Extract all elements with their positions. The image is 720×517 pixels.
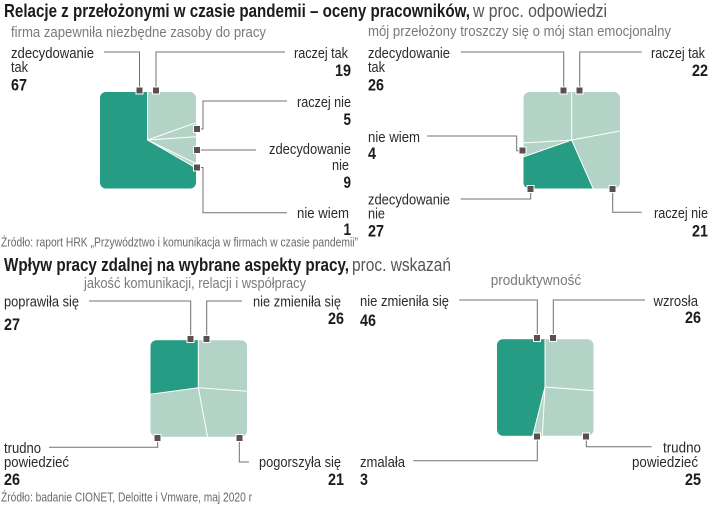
label: wzrosła 26: wzrosła [653,293,699,310]
label: raczej nie 21 [654,205,708,240]
leader: raczej tak [152,52,285,94]
label: raczej tak 19: 19 [335,61,351,80]
label: trudno powiedzieć 26 [4,440,69,489]
label: raczej nie 5: raczej nie [297,94,351,111]
heading: section 2: Wpływ pracy zdalnej na wybrane aspekty pracy, [4,255,349,275]
leader: trudno powiedzieć [582,433,652,447]
label: zdecydowanie tak 26: tak [368,59,385,76]
label: pogorszyła się 21 [259,454,344,489]
label: zdecydowanie tak 67: 67 [11,76,27,94]
label: raczej tak 22 [651,45,708,80]
label: poprawiła się 27: 27 [4,315,20,334]
label: zdecydowanie nie 27 [368,192,450,240]
label: zdecydowanie tak 26 [368,45,450,94]
leader: raczej nie [194,101,287,132]
label: zdecydowanie nie 9: 9 [344,173,351,192]
label: raczej nie 21: 21 [692,222,708,240]
label: nie zmieniła się 26 [253,294,344,328]
label: zmalała 3 [360,454,406,489]
subtitle: chart 1: firma zapewniła niezbędne zasoby do pracy [11,25,267,41]
heading: section 1: w proc. odpowiedzi [472,1,607,21]
label: zdecydowanie tak 26: zdecydowanie [368,45,450,62]
label: poprawiła się 27: poprawiła się [4,294,79,310]
leader: trudno powiedzieć [49,434,161,447]
leader: zdecydowanie nie [461,186,534,199]
subtitle: chart 2: mój przełożony troszczy się o mój stan emocjonalny [368,24,672,40]
label: wzrosła 26 [653,293,701,327]
label: trudno powiedzieć 25 [632,440,701,489]
label: zmalała 3: zmalała [360,454,406,471]
leader: nie wiem [427,136,526,154]
leader: zdecydowanie tak [104,52,143,94]
label: zdecydowanie tak 26: 26 [368,76,384,94]
label: trudno powiedzieć 25: trudno [663,440,701,456]
label: zdecydowanie tak 67 [11,45,94,94]
label: raczej nie 21: raczej nie [654,205,708,222]
label: nie wiem 4 [368,129,420,163]
label: nie wiem 1: nie wiem [297,205,349,222]
leader: raczej nie [609,186,642,212]
label: raczej nie 5 [297,94,351,129]
leader: raczej tak [576,52,642,94]
label: zdecydowanie nie 9: nie [332,157,349,174]
source: section 1: Źródło: raport HRK „Przywództwo i komunikacja w firmach w czasie pandemii” [1,234,358,250]
label: zdecydowanie nie 9 [269,141,351,192]
label: zdecydowanie tak 67: zdecydowanie [11,45,94,62]
label: nie zmieniła się 46: nie zmieniła się [360,293,449,310]
label: nie wiem 1 [297,205,351,239]
chart: przełożony troszczy się [427,52,642,212]
chart: produktywność [413,300,652,461]
label: wzrosła 26: 26 [685,308,701,327]
leader: poprawiła się [89,301,194,342]
subtitle: chart 3: jakość komunikacji, relacji i współpracy [83,276,307,292]
chart: jakość komunikacji [49,301,249,462]
label: zmalała 3: 3 [360,470,368,489]
label: pogorszyła się 21: pogorszyła się [259,454,341,471]
label: nie zmieniła się 46: 46 [360,311,376,330]
label: raczej nie 5: 5 [344,110,351,129]
chart: firma zapewniła zasoby [100,52,287,213]
leader: nie zmieniła się [459,300,540,342]
label: pogorszyła się 21: 21 [328,470,344,489]
label: trudno powiedzieć 26: powiedzieć [4,454,69,471]
label: trudno powiedzieć 25: 25 [685,470,701,489]
leader: nie zmieniła się [203,301,242,342]
label: nie wiem 4: nie wiem [368,129,420,146]
leader: nie wiem [194,164,287,213]
source: section 2: Źródło: badanie CIONET, Deloitte i Vmware, maj 2020 r [1,490,252,504]
subtitle: chart 4: produktywność [491,273,581,289]
label: trudno powiedzieć 26: 26 [4,470,20,489]
leader: zdecydowanie nie [194,146,256,154]
label: zdecydowanie nie 27: 27 [368,222,384,240]
label: trudno powiedzieć 25: powiedzieć [632,454,698,471]
label: raczej tak 19 [294,45,351,80]
label: zdecydowanie nie 27: zdecydowanie [368,192,450,208]
label: raczej tak 22: raczej tak [651,45,705,62]
label: raczej tak 22: 22 [692,61,708,80]
leader: pogorszyła się [236,434,249,462]
leader: zmalała [413,433,540,461]
label: zdecydowanie nie 9: zdecydowanie [269,141,351,158]
label: poprawiła się 27 [4,294,79,334]
label: nie zmieniła się 26: nie zmieniła się [253,294,341,310]
label: nie wiem 1: 1 [344,220,351,239]
heading: section 2: proc. wskazań [352,255,451,275]
label: zdecydowanie tak 67: tak [11,59,28,76]
heading: section 1: Relacje z przełożonymi w czasie pandemii – oceny pracowników, [4,1,470,21]
label: raczej tak 19: raczej tak [294,45,348,62]
label: nie zmieniła się 26: 26 [328,309,344,328]
label: nie zmieniła się 46 [360,293,449,330]
label: zdecydowanie nie 27: nie [368,206,385,222]
leader: zdecydowanie tak [461,52,567,94]
leader: wzrosła [550,300,645,342]
label: trudno powiedzieć 26: trudno [4,440,41,457]
label: nie wiem 4: 4 [368,144,376,163]
